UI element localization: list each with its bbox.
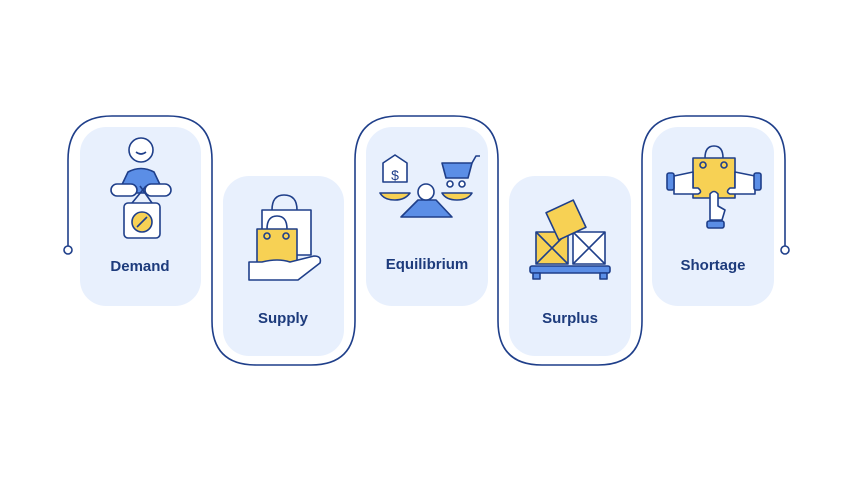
label: demand: Demand	[110, 258, 170, 275]
icon: scale	[380, 155, 480, 217]
label: shortage: Shortage	[680, 257, 746, 274]
label: surplus: Surplus	[542, 310, 598, 327]
icon: person with bag	[111, 138, 171, 238]
label: equilibrium: Equilibrium	[386, 256, 468, 273]
icon: boxes on pallet	[530, 200, 610, 279]
panel: shortage	[652, 127, 774, 306]
icon: hands with bag	[667, 146, 761, 228]
panel: supply	[223, 176, 344, 356]
panel: demand	[80, 127, 201, 306]
icon: scale: $	[391, 167, 399, 183]
icon: bags on hand	[249, 195, 320, 280]
panel: surplus	[509, 176, 631, 356]
panel: equilibrium	[366, 127, 488, 306]
label: supply: Supply	[258, 310, 309, 327]
connector outline path	[64, 116, 789, 365]
